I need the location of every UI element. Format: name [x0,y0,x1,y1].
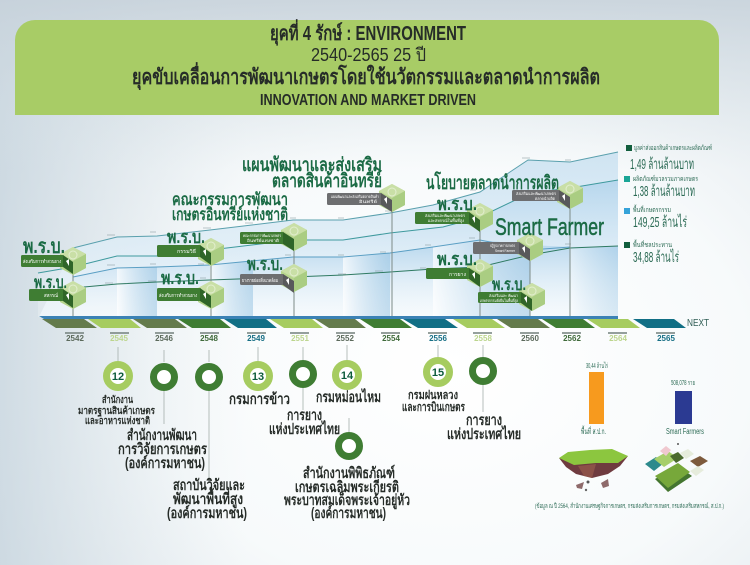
milestone: นโยบายตลาดนำการผลิต: ตลาดนำผลิต [535,196,555,201]
milestone: Smart Farmer: Smart Farmer [495,214,604,241]
agency 14 [316,364,381,406]
agency 14: กรมหม่อนไหม [316,387,381,406]
agency ring 2558: แห่งประเทศไทย [447,424,521,443]
label: NEXT: NEXT [687,318,709,329]
year labels [65,333,675,343]
milestone: คณะกรรมการพัฒนาเกษตรอินทรีย์แห่งชาติ: คณะกรรมการพัฒนาเกษตร [243,233,282,238]
agency 13: กรมการข้าว [229,391,290,408]
milestone: แผนพัฒนาและส่งเสริมตลาดสินค้าอินทรีย์: แผนพัฒนาและส่งเสริม [242,155,382,176]
legend item: irrigated land: 34,88 ล้านไร่ [633,248,679,266]
milestone: พ.ร.บ. 2551 [240,254,307,293]
agency 13: 13 [252,371,264,383]
milestone: พ.ร.บ. 2556 top: และสหกรณ์ในพื้นที่สูง [428,216,464,224]
year labels: 2565 [657,334,675,343]
bar chart: ALRO land: พื้นที่ ส.ป.ก. [581,425,606,436]
year labels: 2551 [291,334,309,343]
legend item: agri GDP: ผลิตภัณฑ์มวลรวมภาคเกษตร [633,175,698,183]
milestone: แผนพัฒนาและส่งเสริมตลาดสินค้าอินทรีย์ [242,155,405,212]
legend item: irrigated land: พื้นที่ชลประทาน [633,238,672,249]
milestone: พ.ร.บ. top 2542 [21,236,86,275]
milestone: แผนพัฒนาและส่งเสริมตลาดสินค้าอินทรีย์: ตลาดสินค้าอินทรีย์ [272,170,382,192]
milestone: พ.ร.บ. 2558: พ.ร.บ. [492,275,526,294]
milestone: พ.ร.บ. 2556 lower: พ.ร.บ. [437,249,477,269]
icon: floating island [559,449,628,491]
bar chart: ALRO land [581,361,608,436]
agency ring 2546: การวิจัยการเกษตร [118,440,208,458]
milestone: Smart Farmer: ปฏิรูปภาคการเกษตร [490,243,516,249]
milestone: พ.ร.บ. 2556 lower [426,249,493,287]
milestone: นโยบายตลาดนำการผลิต: นโยบายตลาดนำการผลิต [426,171,559,194]
agency ring 2551: การยาง [287,407,322,424]
milestone: พ.ร.บ. 2556 top: ส่งเสริมและพัฒนาเกษตร [425,213,466,218]
milestone: นโยบายตลาดนำการผลิต: ส่งเสริมและพัฒนาเกษตร [516,191,557,196]
milestone: พ.ร.บ. top 2548: กรรมวิธี [177,248,196,255]
title banner [15,18,719,115]
milestone: แผนพัฒนาและส่งเสริมตลาดสินค้าอินทรีย์: อินทรีย์ [358,199,377,204]
year labels: 2545 [110,334,128,343]
agency 15 [402,360,465,414]
year labels: 2554 [382,334,400,343]
legend item: export value: มูลค่าส่งออกสินค้าเกษตรและผลิตภัณฑ์ [634,144,712,152]
title line 3: ยุคขับเคลื่อนการพัฒนาเกษตรโดยใช้นวัตกรรมและตลาดนำการผลิต [132,61,600,91]
year labels: 2542 [66,334,84,343]
agency 12 [78,364,156,427]
connector lines [118,345,483,480]
agency ring 2548 [167,366,247,522]
year labels: 2546 [155,334,173,343]
milestone: คณะกรรมการพัฒนาเกษตรอินทรีย์แห่งชาติ: อินทรีย์แห่งชาติ [246,238,279,243]
agency 12: และอาหารแห่งชาติ [85,415,150,427]
agency ring 2548: สถาบันวิจัยและ [173,476,245,494]
bar chart: Smart Farmers: Smart Farmers [666,427,704,436]
year labels: 2560 [521,334,539,343]
milestone: พ.ร.บ. 2556 top: พ.ร.บ. [437,194,477,214]
milestone: แผนพัฒนาและส่งเสริมตลาดสินค้าอินทรีย์: แผนพัฒนาและส่งเสริมตลาดสินค้า [331,194,379,199]
legend item: farm land: พื้นที่เกษตรกรรม [633,203,671,214]
milestone: พ.ร.บ. 2556 lower: การยาง [449,272,467,278]
milestone: พ.ร.บ. lower 2548: พ.ร.บ. [161,268,199,288]
agency 12: มาตรฐานสินค้าเกษตร [78,405,156,417]
milestone poles [73,195,570,317]
milestone: พ.ร.บ. 2551: ยางรายย่อยสิ่งแวดล้อม [242,277,278,284]
legend [624,144,712,266]
milestone: นโยบายตลาดนำการผลิต [426,171,583,209]
agency 12: สำนักงาน [102,394,133,406]
agency 13 [229,364,290,408]
year labels: 2558 [474,334,492,343]
milestone: พ.ร.บ. 2558: ส่งเสริมและ พัฒนา [489,293,518,298]
bar chart: Smart Farmers: 508,078 ราย [671,380,695,387]
year labels: 2562 [563,334,581,343]
milestone: พ.ร.บ. top 2542: ส่งเสริมการทำสวนยาง [23,258,61,265]
title line 1: ยุคที่ 4 รักษ์ : ENVIRONMENT [270,18,466,46]
agency ring 2546 [118,366,208,472]
year labels: 2552 [336,334,354,343]
agency 14: 14 [341,370,354,382]
milestone: พ.ร.บ. top 2542: พ.ร.บ. [23,236,65,258]
bar chart: Smart Farmers [666,380,704,436]
milestone: พ.ร.บ. lower 2548 [157,268,224,309]
milestone: พ.ร.บ. lower 2542: พ.ร.บ. [34,273,67,292]
agency 12: 12 [112,371,124,383]
agency 15: กรมฝนหลวง [408,388,458,402]
agency ring 2552: (องค์การมหาชน) [311,504,386,522]
milestone: พ.ร.บ. top 2548: พ.ร.บ. [167,227,205,247]
milestone: พ.ร.บ. 2558: เกษตรกรรมยั่งยืนในพื้นที่สูง [480,296,518,304]
year labels: 2556 [429,334,447,343]
milestone: พ.ร.บ. 2558 [478,275,545,311]
agency ring 2551 [269,364,340,438]
milestone: พ.ร.บ. lower 2542 [29,273,86,309]
legend item: farm land [624,203,687,231]
legend item: agri GDP: 1,38 ล้านล้านบาท [633,183,695,200]
milestone: Smart Farmer [473,214,604,261]
agency ring 2558 [447,360,521,443]
agency ring 2548: พัฒนาพื้นที่สูง [173,487,243,509]
milestone: Smart Farmer: Smart Farmer [495,248,516,253]
year labels: 2564 [609,334,627,343]
milestone: พ.ร.บ. lower 2548: ส่งเสริมการทำสวนยาง [159,292,197,299]
timeline band [39,316,709,329]
bar chart: ALRO land: 30,44 ล้านไร่ [586,361,608,370]
agency ring 2552: สำนักงานพิพิธภัณฑ์ [303,464,395,482]
legend item: export value: 1,49 ล้านล้านบาท [630,156,694,173]
year labels: 2549 [247,334,265,343]
title line 4: INNOVATION AND MARKET DRIVEN [260,92,476,109]
legend item: agri GDP [624,175,698,200]
agency ring 2546: (องค์การมหาชน) [125,454,205,472]
milestone: คณะกรรมการพัฒนาเกษตรอินทรีย์แห่งชาติ [172,190,307,251]
agency 15: 15 [432,367,444,379]
agency ring 2546: สำนักงานพัฒนา [127,427,197,444]
legend item: irrigated land [624,238,679,266]
agency ring 2558: การยาง [466,412,502,429]
milestone: คณะกรรมการพัฒนาเกษตรอินทรีย์แห่งชาติ: เกษตรอินทรีย์แห่งชาติ [172,204,288,224]
milestone: พ.ร.บ. lower 2542: สหกรณ์ [44,292,58,299]
agency ring 2552 [284,436,410,522]
milestone: คณะกรรมการพัฒนาเกษตรอินทรีย์แห่งชาติ: คณะกรรมการพัฒนา [172,190,288,209]
milestone: พ.ร.บ. 2556 top [415,194,493,232]
legend item: export value [626,144,712,173]
agency ring 2548: (องค์การมหาชน) [167,504,247,522]
icon: smart farm [645,443,708,492]
agency ring 2551: แห่งประเทศไทย [269,419,340,438]
year labels: 2548 [200,334,218,343]
legend item: farm land: 149,25 ล้านไร่ [633,213,687,231]
title line 2: 2540-2565 25 ปี [311,45,426,65]
milestone: พ.ร.บ. top 2548 [157,227,224,266]
agency ring 2552: พระบาทสมเด็จพระเจ้าอยู่หัว [284,490,410,510]
agency ring 2552: เกษตรเฉลิมพระเกียรติ [295,478,399,496]
milestone: พ.ร.บ. 2551: พ.ร.บ. [247,254,283,274]
agency 15: และการบินเกษตร [402,400,465,414]
area chart: trend lines [38,152,618,317]
